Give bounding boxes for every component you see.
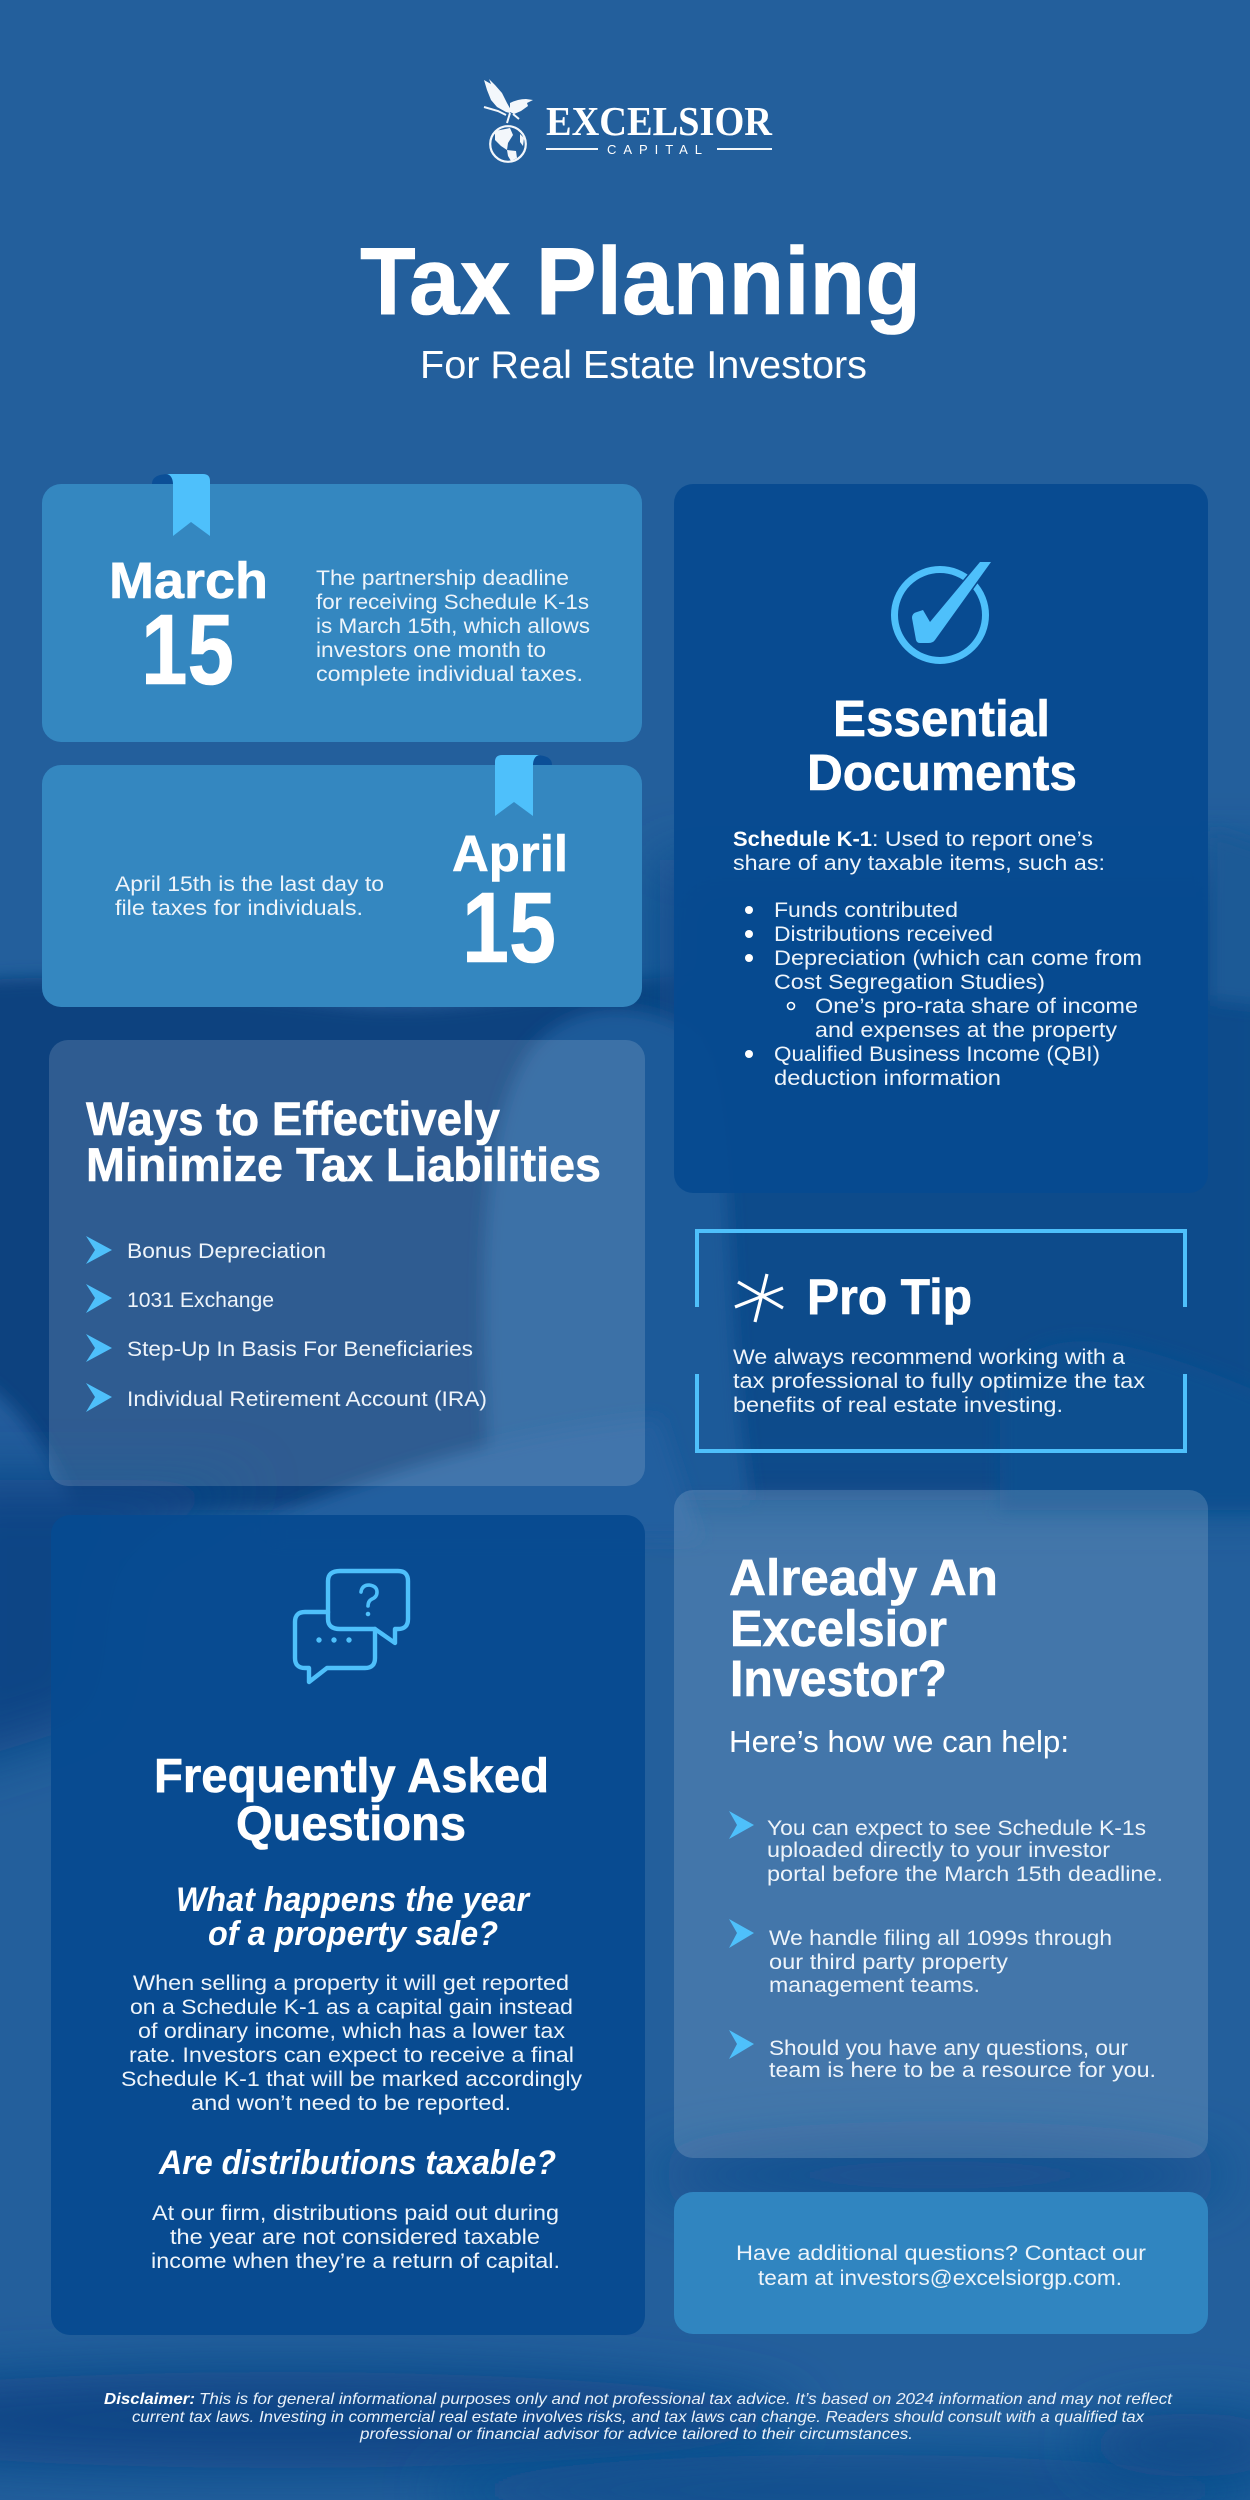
contact text: team at investors@excelsiorgp.com. [758, 2267, 1122, 2290]
logo: Excelsior Capital [484, 79, 772, 162]
answer 1: on a Schedule K-1 as a capital gain instead [130, 1996, 573, 2019]
month: March [109, 552, 268, 609]
icon: bookmark ribbon [152, 474, 210, 536]
panel: Pro Tip [697, 1231, 1185, 1451]
list item: Bonus Depreciation [86, 1236, 326, 1264]
help item 1: uploaded directly to your investor [767, 1839, 1110, 1862]
heading: Pro Tip [807, 1269, 972, 1325]
list item: Bonus Depreciation: Bonus Depreciation [127, 1240, 326, 1263]
panel: March 15 [42, 474, 642, 742]
answer 1 [121, 1972, 583, 2115]
panel: Already An Excelsior Investor [674, 1490, 1208, 2158]
day number: 15 [141, 594, 234, 706]
title: Tax Planning [360, 228, 921, 335]
answer 1: When selling a property it will get reported [133, 1972, 569, 1995]
heading [154, 1750, 549, 1851]
bullet list: Qualified Business Income (QBI) [774, 1043, 1100, 1066]
panel: April 15 [42, 755, 642, 1007]
question 1 [176, 1881, 531, 1953]
help item 2: We handle filing all 1099s through [769, 1927, 1112, 1950]
heading: Minimize Tax Liabilities [86, 1138, 601, 1191]
heading [86, 1092, 601, 1191]
bullet list: Distributions received [774, 923, 993, 946]
disclaimer: This is for general informational purposes only and not professional tax advice. It’s based on 2024 information and may not reflect [199, 2391, 1173, 2408]
list item: Step-Up In Basis [86, 1334, 473, 1362]
help item 1 [729, 1811, 1163, 1886]
heading: Investor? [730, 1650, 947, 1707]
help item 2: our third party property [769, 1951, 1009, 1974]
intro text: : Used to report one’s [872, 828, 1093, 851]
heading: Essential [833, 690, 1050, 747]
list item: IRA [86, 1383, 487, 1412]
description: investors one month to [316, 639, 546, 662]
icon: globe [490, 126, 526, 162]
answer 1: rate. Investors can expect to receive a final [129, 2044, 574, 2067]
list item: IRA: Individual Retirement Account (IRA) [127, 1388, 487, 1411]
description: file taxes for individuals. [115, 897, 363, 920]
answer 2: At our firm, distributions paid out during [152, 2202, 559, 2225]
bullet list: deduction information [774, 1067, 1001, 1090]
disclaimer [104, 2391, 1173, 2443]
description: is March 15th, which allows [316, 615, 590, 638]
answer 1: of ordinary income, which has a lower tax [138, 2020, 566, 2043]
month: April [452, 825, 568, 882]
intro text [733, 828, 1105, 875]
contact text: Have additional questions? Contact our [736, 2242, 1146, 2265]
help item 2: management teams. [769, 1974, 980, 1997]
heading: Already An [729, 1549, 998, 1606]
wordmark: EXCELSIOR [546, 98, 772, 144]
icon: asterisk [735, 1274, 783, 1322]
help item 1: You can expect to see Schedule K-1s [767, 1817, 1146, 1840]
panel: Essential Documents [674, 484, 1208, 1193]
question 1: of a property sale? [208, 1915, 498, 1953]
heading [807, 690, 1077, 801]
intro text: share of any taxable items, such as: [733, 852, 1105, 875]
icon: chat bubbles [295, 1571, 408, 1682]
icon: check mark in circle [894, 562, 991, 660]
help item 1: portal before the March 15th deadline. [767, 1863, 1163, 1886]
tip text [733, 1346, 1146, 1417]
heading [729, 1549, 998, 1707]
description: April 15th is the last day to [115, 873, 384, 896]
help item 3: Should you have any questions, our [769, 2037, 1128, 2060]
help item 3: team is here to be a resource for you. [769, 2059, 1156, 2082]
list item: 1031 Exchange [86, 1284, 274, 1313]
day number: 15 [462, 872, 556, 984]
list item: Step-Up In Basis: Step-Up In Basis For Beneficiaries [127, 1338, 473, 1361]
heading: Questions [236, 1798, 466, 1851]
bullet list [745, 899, 1142, 1090]
answer 2: income when they’re a return of capital. [151, 2250, 560, 2273]
bullet list: and expenses at the property [815, 1019, 1118, 1042]
help item 3 [729, 2030, 1156, 2082]
disclaimer: current tax laws. Investing in commercial real estate involves risks, and tax laws can change. Readers should consult with a qualified tax [132, 2409, 1145, 2426]
panel: Frequently Asked Questions [51, 1515, 645, 2335]
answer 1: and won’t need to be reported. [191, 2092, 511, 2115]
list item: 1031 Exchange: 1031 Exchange [127, 1289, 274, 1312]
sub wordmark: CAPITAL [607, 142, 702, 157]
intro text: Schedule K-1 [733, 828, 872, 851]
question 2: Are distributions taxable? [158, 2144, 556, 2182]
description: The partnership deadline [316, 567, 569, 590]
help item 2 [729, 1919, 1112, 1997]
answer 1: Schedule K-1 that will be marked accordingly [121, 2068, 583, 2091]
tip text: benefits of real estate investing. [733, 1394, 1063, 1417]
answer 2: the year are not considered taxable [170, 2226, 540, 2249]
heading: Ways to Effectively [86, 1092, 500, 1145]
icon: bookmark ribbon [495, 755, 552, 816]
disclaimer: Disclaimer: [104, 2391, 195, 2408]
icon: eagle [484, 79, 533, 123]
description: for receiving Schedule K-1s [316, 591, 589, 614]
description: complete individual taxes. [316, 663, 583, 686]
bullet list: Depreciation (which can come from [774, 947, 1142, 970]
tip text: tax professional to fully optimize the tax [733, 1370, 1146, 1393]
answer 2 [151, 2202, 560, 2273]
tip text: We always recommend working with a [733, 1346, 1125, 1369]
description [316, 567, 590, 686]
bullet list: One’s pro-rata share of income [815, 995, 1138, 1018]
disclaimer: professional or financial advisor for advice tailored to their circumstances. [359, 2426, 913, 2443]
bullet list: Funds contributed [774, 899, 958, 922]
bullet list: Cost Segregation Studies) [774, 971, 1045, 994]
heading: Documents [807, 744, 1077, 801]
question 1: What happens the year [176, 1881, 531, 1919]
panel: Ways to Minimize Tax Liabilities [49, 1040, 645, 1486]
description [115, 873, 384, 920]
contact text [736, 2242, 1146, 2290]
panel: contact callout [674, 2192, 1208, 2334]
heading: Frequently Asked [154, 1750, 549, 1803]
heading: Excelsior [730, 1600, 947, 1657]
subtitle: For Real Estate Investors [420, 344, 867, 387]
subheading: Here’s how we can help: [729, 1724, 1069, 1759]
